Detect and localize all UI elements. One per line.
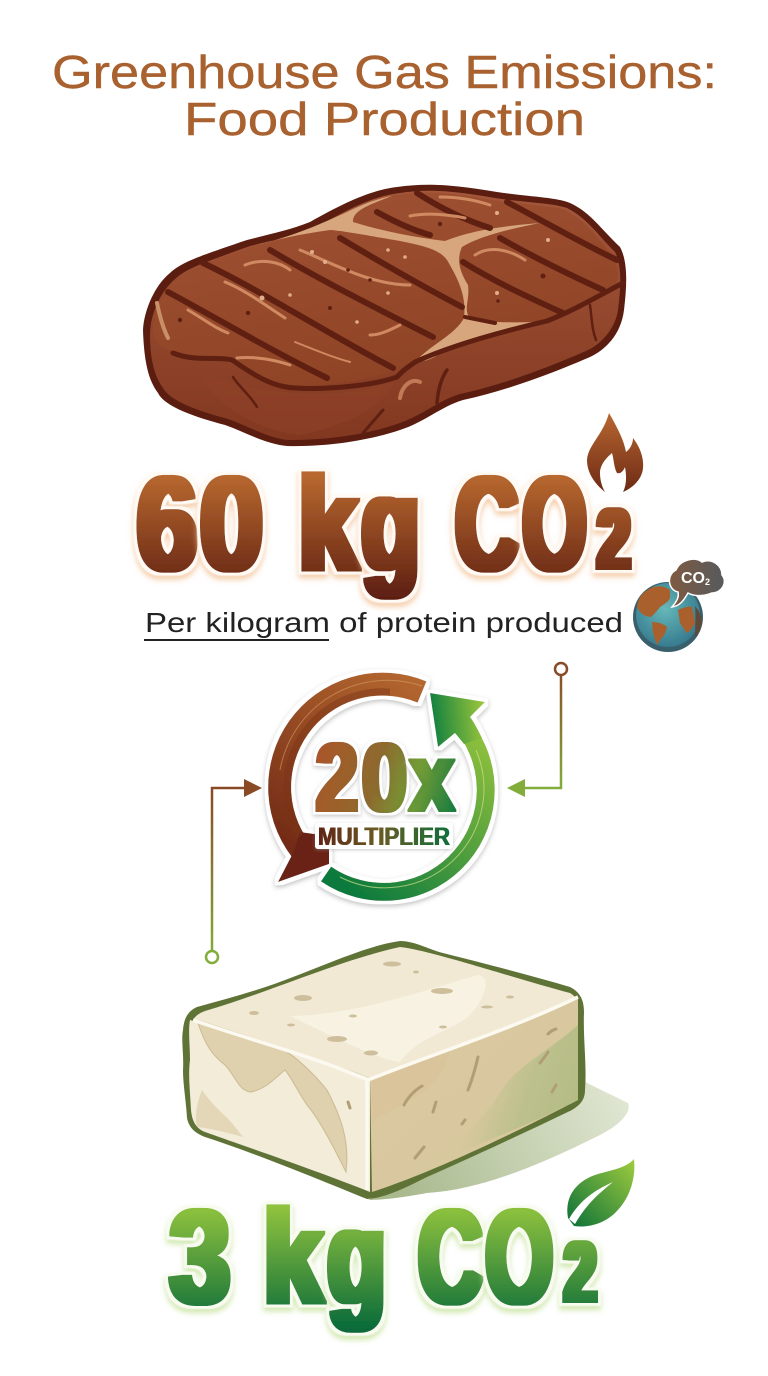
20x: x	[410, 723, 454, 832]
steak top face	[153, 192, 618, 386]
tofu side pores	[348, 1029, 556, 1158]
big value: 60 kg CO2: 2	[598, 492, 630, 588]
big value: 60 kg CO2: 6	[137, 450, 197, 599]
big value: 60 kg CO2: k	[298, 450, 358, 599]
marbling fat	[255, 196, 547, 362]
steak speckles dark	[178, 222, 546, 322]
tofu top face	[193, 947, 577, 1078]
big value: 3 kg CO2: g	[328, 1183, 386, 1332]
title: Greenhouse Gas Emissions:	[52, 46, 717, 98]
CO2 cloud	[669, 559, 724, 607]
tofu left patch	[197, 1020, 347, 1172]
big value: 3 kg CO2	[170, 1183, 596, 1332]
title: Food Production	[184, 93, 585, 145]
title	[52, 46, 717, 145]
tofu outline	[182, 941, 586, 1199]
icon: earth with CO2 cloud	[633, 559, 724, 652]
steak rim crease	[173, 283, 623, 388]
icon: tofu block	[182, 941, 629, 1200]
icon: leaf	[567, 1159, 634, 1226]
big value: 3 kg CO2: O	[486, 1183, 552, 1332]
badge: 20x multiplier	[278, 680, 486, 892]
20x: 0	[362, 723, 407, 832]
CO2 cloud: CO	[681, 570, 705, 587]
big value: 60 kg CO2: O	[523, 450, 586, 599]
multiplier label: MULTIPLIER	[318, 823, 450, 851]
tofu right face	[370, 997, 578, 1192]
subtitle: Per kilogram of protein produced	[145, 607, 623, 638]
big value: 60 kg CO2: 0	[200, 450, 263, 599]
tofu edge highlight	[193, 997, 578, 1190]
tofu left face	[189, 1020, 370, 1192]
big value: 60 kg CO2: g	[362, 450, 420, 599]
connector: left, tofu to badge	[206, 779, 262, 963]
steak tan rim	[157, 303, 168, 338]
grill marks	[168, 193, 617, 378]
icon: flame	[587, 413, 643, 492]
big value: 3 kg CO2: 2	[565, 1226, 596, 1320]
circular arrows	[278, 680, 486, 892]
tofu top pores	[249, 962, 514, 1056]
20x: 2	[316, 723, 358, 832]
icon: grilled steak	[143, 185, 626, 446]
big value: 3 kg CO2: k	[264, 1183, 323, 1332]
big value: 3 kg CO2: 3	[170, 1183, 230, 1332]
steak side creases	[233, 305, 596, 433]
steak side shading	[200, 375, 395, 435]
steak speckles light	[260, 211, 550, 324]
big value: 60 kg CO2	[137, 450, 630, 599]
CO2 cloud: 2	[705, 577, 710, 587]
big value: 3 kg CO2: C	[419, 1183, 482, 1332]
20x	[316, 723, 454, 832]
steak highlights	[188, 197, 525, 398]
big value: 60 kg CO2: C	[456, 450, 518, 599]
connector: right, steak to badge	[507, 663, 567, 797]
tofu green tint	[445, 1025, 578, 1158]
tofu shadow	[368, 1082, 629, 1200]
